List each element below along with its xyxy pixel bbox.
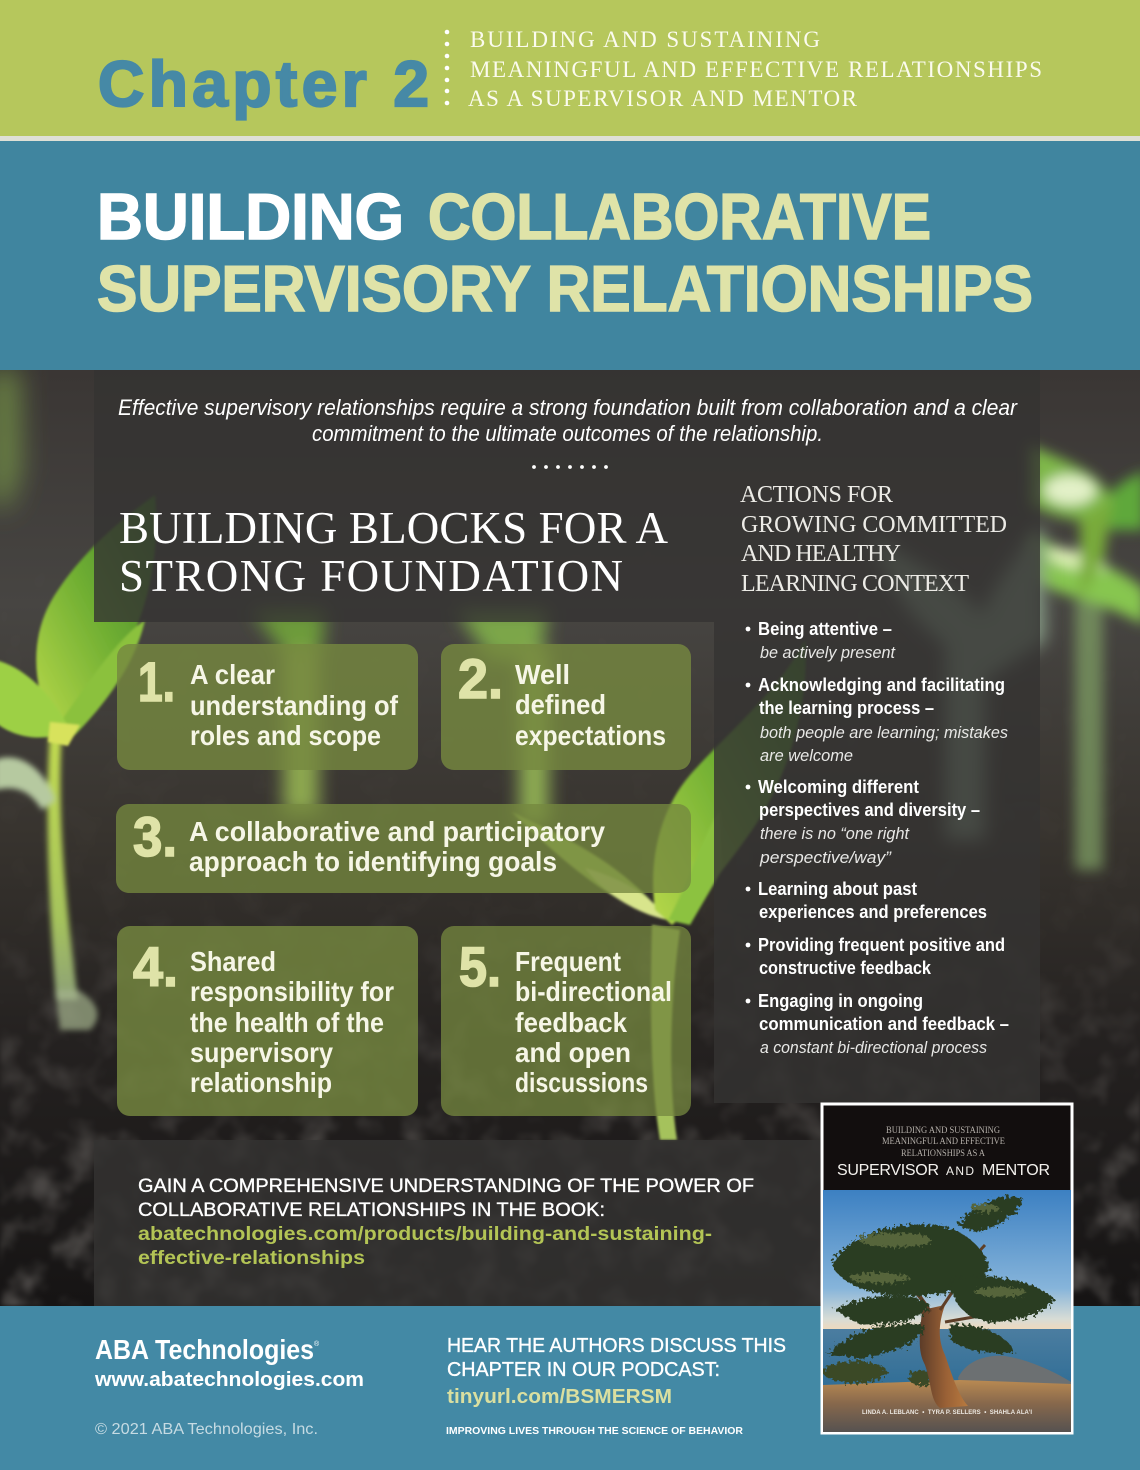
card 5: and open <box>515 1037 631 1068</box>
left leaves <box>36 495 156 725</box>
main title: BUILDING <box>97 180 404 253</box>
dark translucent overlays <box>94 370 1040 1306</box>
book title in header: MEANINGFUL AND EFFECTIVE RELATIONSHIPS <box>470 57 1042 82</box>
chapter label: Chapter 2 <box>98 48 429 120</box>
actions list: both people are learning; mistakes <box>760 723 1008 742</box>
actions list: perspective/way” <box>759 848 892 867</box>
book call to action: abatechnologies.com/products/building-and-sustaining- <box>138 1223 712 1245</box>
title band <box>0 141 1140 370</box>
cover title: SUPERVISOR <box>837 1162 939 1179</box>
book title in header <box>468 27 1042 111</box>
actions heading <box>740 482 1007 597</box>
building blocks heading: STRONG FOUNDATION <box>119 551 623 601</box>
podcast text: HEAR THE AUTHORS DISCUSS THIS <box>447 1335 786 1357</box>
actions heading: GROWING COMMITTED <box>741 512 1007 538</box>
card 3: approach to identifying goals <box>189 846 557 877</box>
cover title: RELATIONSHIPS AS A <box>901 1149 985 1159</box>
card 5: 5. <box>459 935 501 998</box>
centre-right seedling <box>651 925 680 1140</box>
copyright: © 2021 ABA Technologies, Inc. <box>95 1421 318 1438</box>
card 4: 4. <box>133 935 178 998</box>
intro text: Effective supervisory relationships require a strong foundation built from collaboration and a clear <box>118 395 1019 420</box>
book call to action: COLLABORATIVE RELATIONSHIPS IN THE BOOK: <box>138 1199 605 1221</box>
book title in header: AS A SUPERVISOR AND MENTOR <box>468 86 858 111</box>
actions list <box>746 619 1009 1057</box>
building blocks heading: BUILDING BLOCKS FOR A <box>119 503 668 553</box>
book call to action: GAIN A COMPREHENSIVE UNDERSTANDING OF THE POWER OF <box>138 1175 754 1197</box>
podcast text: tinyurl.com/BSMERSM <box>447 1386 672 1408</box>
main title: COLLABORATIVE <box>428 180 931 253</box>
book cover <box>822 1104 1072 1433</box>
card 5: bi-directional <box>515 976 672 1007</box>
left seedling <box>0 730 97 1030</box>
card 4: Shared <box>190 946 276 977</box>
dotted divider <box>445 30 449 105</box>
actions list: are welcome <box>760 746 853 765</box>
card 3: A collaborative and participatory <box>189 816 606 847</box>
card 1: understanding of <box>190 690 399 721</box>
card 5: discussions <box>515 1067 648 1098</box>
actions heading: LEARNING CONTEXT <box>741 571 969 597</box>
actions list: experiences and preferences <box>759 902 987 922</box>
card 5 <box>441 926 691 1116</box>
card 1 <box>117 644 418 770</box>
right seedling <box>1030 445 1140 870</box>
footer band <box>0 1306 1140 1470</box>
actions heading: ACTIONS FOR <box>740 482 893 508</box>
main title <box>97 180 1033 325</box>
dotted separator <box>532 465 608 469</box>
book call to action: effective-relationships <box>138 1247 365 1269</box>
cover title: MENTOR <box>982 1162 1050 1179</box>
card 2 <box>441 644 691 770</box>
actions list: Learning about past <box>758 879 917 899</box>
actions list: Engaging in ongoing <box>758 991 923 1011</box>
cover photo: tree <box>823 1190 1071 1432</box>
cover title <box>837 1126 1050 1179</box>
faint seedling behind right column <box>870 520 1045 840</box>
intro text: commitment to the ultimate outcomes of the relationship. <box>312 421 823 446</box>
actions list: the learning process – <box>759 698 934 718</box>
card 3 <box>116 804 691 893</box>
far blurred seedlings <box>252 610 549 825</box>
card 5: feedback <box>515 1007 628 1038</box>
ABA logo: ABA Technologies <box>95 1334 314 1365</box>
card 2: defined <box>515 689 606 720</box>
actions list: Providing frequent positive and <box>758 935 1005 955</box>
card 4: the health of the <box>190 1007 384 1038</box>
book call to action <box>138 1175 754 1269</box>
cover title: BUILDING AND SUSTAINING <box>886 1126 1000 1136</box>
cover title: AND <box>946 1164 974 1178</box>
card 3: 3. <box>133 805 177 868</box>
website: www.abatechnologies.com <box>94 1369 364 1391</box>
actions list: perspectives and diversity – <box>759 800 980 820</box>
card 2: expectations <box>515 720 666 751</box>
card 4: responsibility for <box>190 976 394 1007</box>
building blocks heading <box>119 503 668 601</box>
actions list: constructive feedback <box>759 958 932 978</box>
card 5: Frequent <box>515 946 621 977</box>
background photo: seedlings in soil <box>0 370 1140 1306</box>
card 4: relationship <box>190 1067 332 1098</box>
actions list: Being attentive – <box>758 619 892 639</box>
intro text <box>118 395 1019 446</box>
header band <box>0 0 1140 141</box>
card 1: A clear <box>190 659 275 690</box>
tagline: IMPROVING LIVES THROUGH THE SCIENCE OF BEHAVIOR <box>446 1426 744 1437</box>
card 4 <box>117 926 418 1116</box>
cover authors: LINDA A. LEBLANC • TYRA P. SELLERS • SHAHLA ALA’I <box>862 1410 1032 1416</box>
actions heading: AND HEALTHY <box>741 541 901 567</box>
actions list: Welcoming different <box>758 777 919 797</box>
actions list: be actively present <box>760 643 896 662</box>
podcast text <box>447 1335 786 1408</box>
card 1: 1. <box>138 650 175 713</box>
actions list: there is no “one right <box>760 824 910 843</box>
actions list: a constant bi-directional process <box>760 1038 987 1057</box>
cover title: MEANINGFUL AND EFFECTIVE <box>882 1137 1005 1147</box>
main title: SUPERVISORY RELATIONSHIPS <box>97 252 1033 325</box>
actions list: communication and feedback – <box>759 1014 1009 1034</box>
podcast text: CHAPTER IN OUR PODCAST: <box>447 1359 720 1381</box>
book title in header: BUILDING AND SUSTAINING <box>470 27 820 52</box>
actions list: Acknowledging and facilitating <box>758 675 1005 695</box>
card 1: roles and scope <box>190 720 381 751</box>
ABA logo: ® <box>314 1340 320 1348</box>
card 2: Well <box>515 659 570 690</box>
card 4: supervisory <box>190 1037 334 1068</box>
card 2: 2. <box>458 647 503 710</box>
